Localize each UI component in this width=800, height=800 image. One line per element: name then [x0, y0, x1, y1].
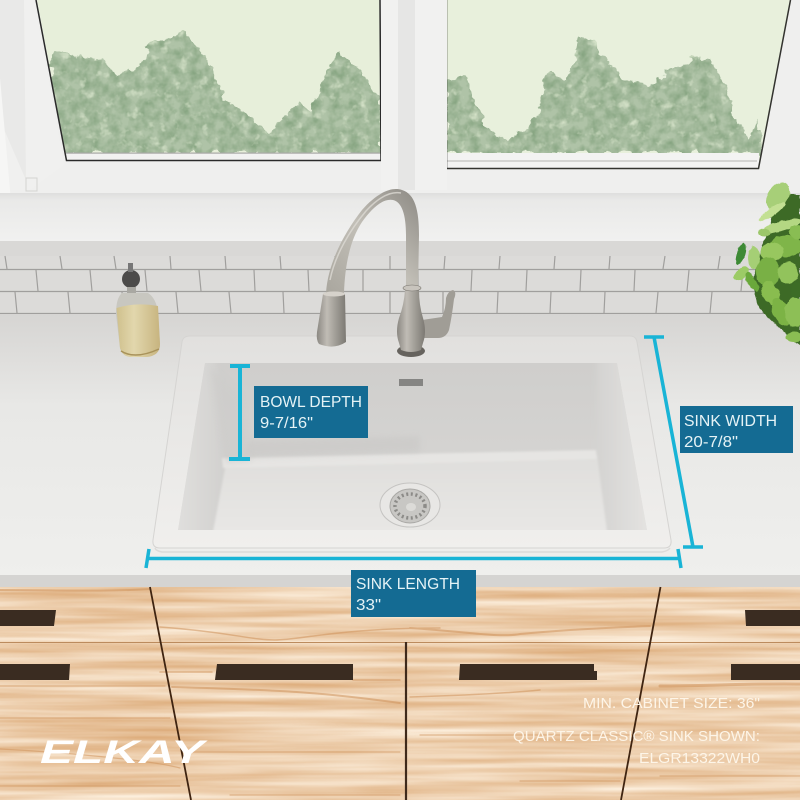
faucet spout: [326, 189, 419, 293]
sink rim: [153, 336, 671, 548]
bushes outside right pane: [447, 37, 762, 153]
window mullion: [381, 0, 447, 190]
sink bowl: [178, 363, 647, 530]
faucet handle: [422, 290, 455, 338]
sink length label: SINK LENGTH: [356, 576, 460, 593]
bushes outside left pane: [50, 32, 381, 153]
sink length label: 33": [356, 597, 381, 614]
model note: [513, 729, 760, 767]
sink length label: [351, 570, 476, 617]
soap bottle: [116, 263, 160, 357]
plant on the sill: [731, 178, 800, 345]
Elkay logo: ELKAY: [40, 734, 208, 770]
sink: [153, 336, 671, 552]
bowl depth label: BOWL DEPTH: [260, 394, 362, 411]
window: left pane: [0, 0, 381, 200]
countertop: [0, 314, 800, 587]
window sill: [0, 193, 800, 256]
sink width label: 20-7/8": [684, 434, 738, 451]
brand badge on bowl: [399, 379, 423, 386]
dimension: sink width: [644, 337, 793, 547]
cabinet size note: MIN. CABINET SIZE: 36": [583, 696, 760, 712]
faucet pull-down head: [317, 294, 346, 347]
bowl depth label: [254, 386, 368, 438]
drawer handles: [0, 610, 800, 680]
window wall background: [0, 0, 800, 200]
window: right pane: [446, 0, 800, 200]
bowl depth line: [229, 366, 250, 459]
dimension: sink length: [146, 549, 681, 617]
model note: ELGR13322WH0: [639, 751, 760, 767]
bowl depth label: 9-7/16": [260, 415, 313, 432]
faucet base ring: [397, 345, 425, 357]
wood grain streaks: [0, 589, 800, 795]
sink width line: [644, 337, 703, 547]
sink length line: [146, 549, 681, 568]
dimension: bowl depth: [229, 366, 368, 459]
drawer and door seams: [0, 587, 800, 800]
sink width label: SINK WIDTH: [684, 413, 777, 430]
tiled backsplash: [0, 256, 800, 314]
faucet body: [397, 290, 425, 352]
sink width label: [680, 406, 793, 453]
wood cabinets: [0, 587, 800, 800]
left window jamb: [0, 0, 64, 235]
drain: [380, 483, 440, 527]
model note: QUARTZ CLASSIC® SINK SHOWN:: [513, 729, 760, 745]
faucet: [317, 189, 455, 357]
